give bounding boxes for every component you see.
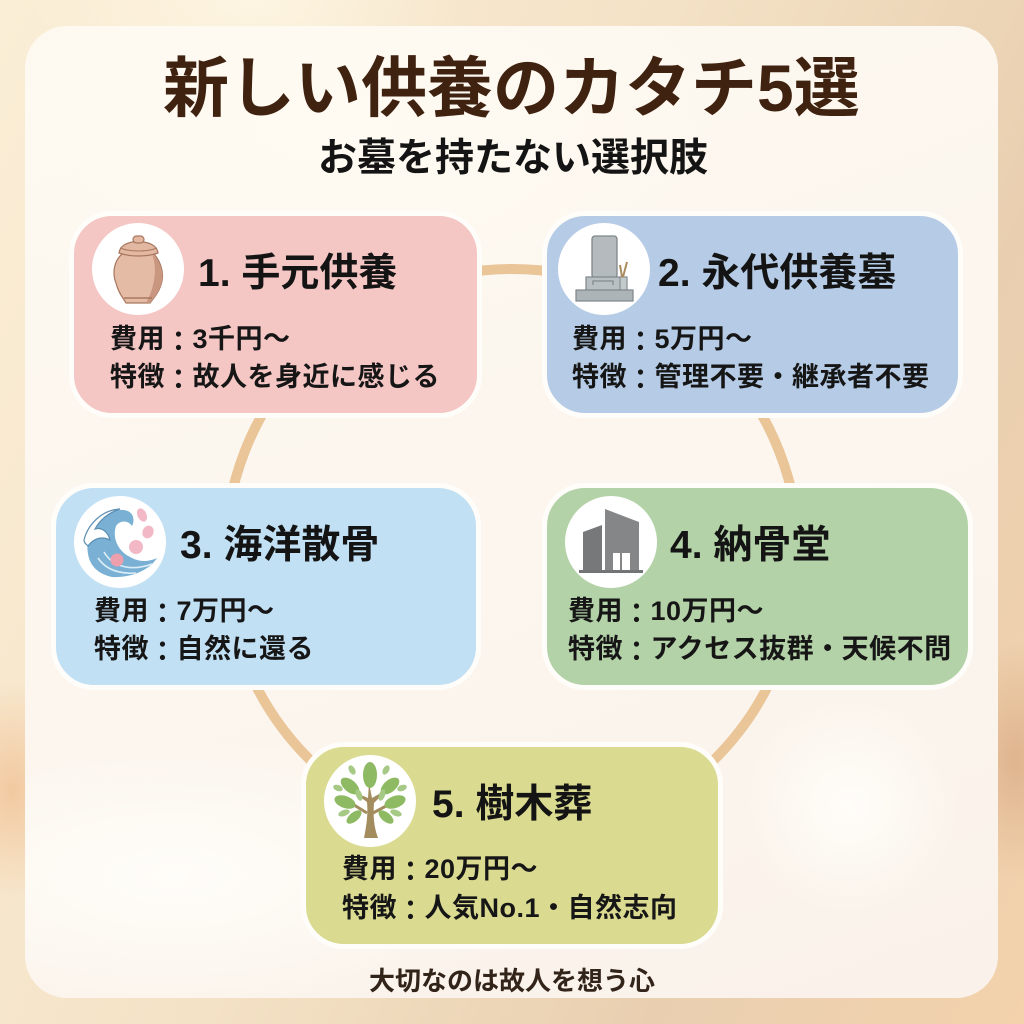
footer message: 大切なのは故人を想う心 [369, 966, 655, 996]
heading: 4. 納骨堂 [670, 524, 830, 567]
title: 新しい供養のカタチ5選 [163, 51, 860, 125]
heading: 3. 海洋散骨 [180, 524, 379, 567]
feature: 特徴：故人を身近に感じる [110, 362, 440, 395]
panel: card 3 海洋散骨 [51, 483, 481, 690]
icon: tree [324, 755, 416, 847]
heading: 2. 永代供養墓 [658, 252, 896, 295]
cost: 費用：5万円～ [572, 324, 753, 357]
panel: card 2 永代供養墓 [542, 211, 963, 418]
subtitle: お墓を持たない選択肢 [318, 137, 708, 180]
panel: card 1 手元供養 [69, 211, 482, 418]
feature: 特徴：アクセス抜群・天候不問 [568, 634, 952, 667]
cost: 費用：20万円～ [342, 854, 538, 887]
feature: 特徴：管理不要・継承者不要 [572, 362, 930, 395]
feature: 特徴：人気No.1・自然志向 [342, 893, 678, 926]
icon: building [565, 496, 657, 588]
cost: 費用：10万円～ [568, 596, 764, 629]
panel: card 5 樹木葬 [301, 742, 723, 949]
heading: 5. 樹木葬 [432, 783, 592, 826]
cost: 費用：7万円～ [94, 596, 275, 629]
icon: urn [92, 223, 184, 315]
panel: card 4 納骨堂 [542, 483, 973, 690]
feature: 特徴：自然に還る [94, 634, 314, 667]
heading: 1. 手元供養 [198, 252, 397, 295]
cost: 費用：3千円～ [110, 324, 291, 357]
icon: wave and blossoms [74, 496, 166, 588]
icon: gravestone [558, 223, 650, 315]
